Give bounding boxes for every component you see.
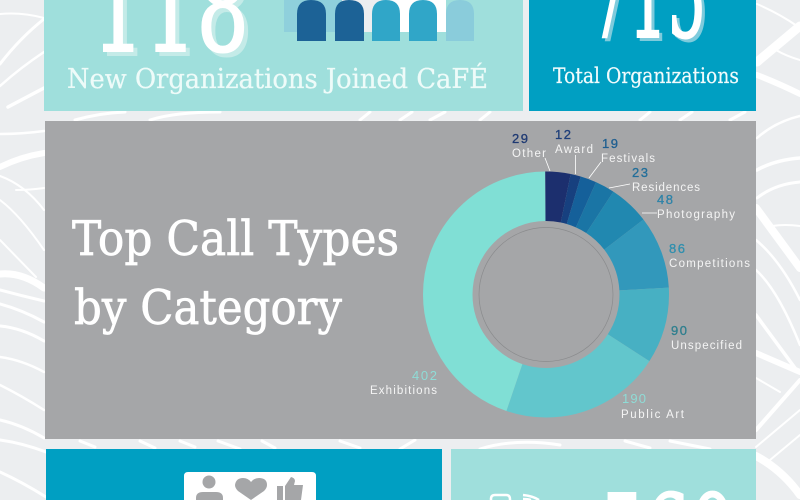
heading: top call types by category: by Category xyxy=(74,280,342,336)
panel: total organizations xyxy=(529,0,756,111)
donut chart xyxy=(448,196,644,393)
panel: new organizations xyxy=(44,0,523,111)
label: photography: Photography xyxy=(657,209,735,221)
panel: top call types xyxy=(45,121,756,439)
label: festivals: Festivals xyxy=(601,153,655,165)
label: exhibitions: 402 xyxy=(412,368,437,383)
label: competitions: Competitions xyxy=(669,258,750,270)
caption: total organizations: Total Organizations xyxy=(553,64,739,89)
label: award: Award xyxy=(555,144,593,156)
label: photography: 48 xyxy=(657,192,673,207)
label: other: 29 xyxy=(512,131,528,146)
label: exhibitions xyxy=(370,368,437,397)
label: festivals: 19 xyxy=(602,136,618,151)
label: unspecified: 90 xyxy=(671,323,687,338)
panel: social engagement xyxy=(46,449,442,500)
label: other: Other xyxy=(512,148,546,160)
icon: phone with signal xyxy=(491,495,539,500)
label: residences: Residences xyxy=(632,182,700,194)
label: festivals xyxy=(601,136,655,165)
caption: new organizations joined: New Organizations Joined CaFÉ xyxy=(67,62,488,95)
heading: top call types by category: Top Call Types xyxy=(72,211,399,267)
stat number: 118 xyxy=(103,0,248,58)
label: other xyxy=(512,131,546,160)
label: unspecified xyxy=(671,323,742,352)
label: public art xyxy=(621,391,685,421)
label: award xyxy=(555,127,593,156)
label: exhibitions: Exhibitions xyxy=(370,385,437,397)
label: photography xyxy=(657,192,735,221)
label: unspecified: Unspecified xyxy=(671,340,742,352)
icon: person, heart and thumbs up badge xyxy=(184,472,316,500)
label: residences xyxy=(632,165,700,194)
label: public art: 190 xyxy=(622,391,646,406)
label: residences: 23 xyxy=(632,165,648,180)
heading: top call types by category xyxy=(72,211,399,336)
icon: row of organization arches xyxy=(284,0,474,41)
panel: mobile stat xyxy=(451,449,756,500)
stat number: 715 xyxy=(602,0,705,42)
label: award: 12 xyxy=(555,127,571,142)
label: competitions xyxy=(669,241,750,270)
label: public art: Public Art xyxy=(621,409,685,421)
label: competitions: 86 xyxy=(669,241,685,256)
leader lines xyxy=(545,155,657,213)
